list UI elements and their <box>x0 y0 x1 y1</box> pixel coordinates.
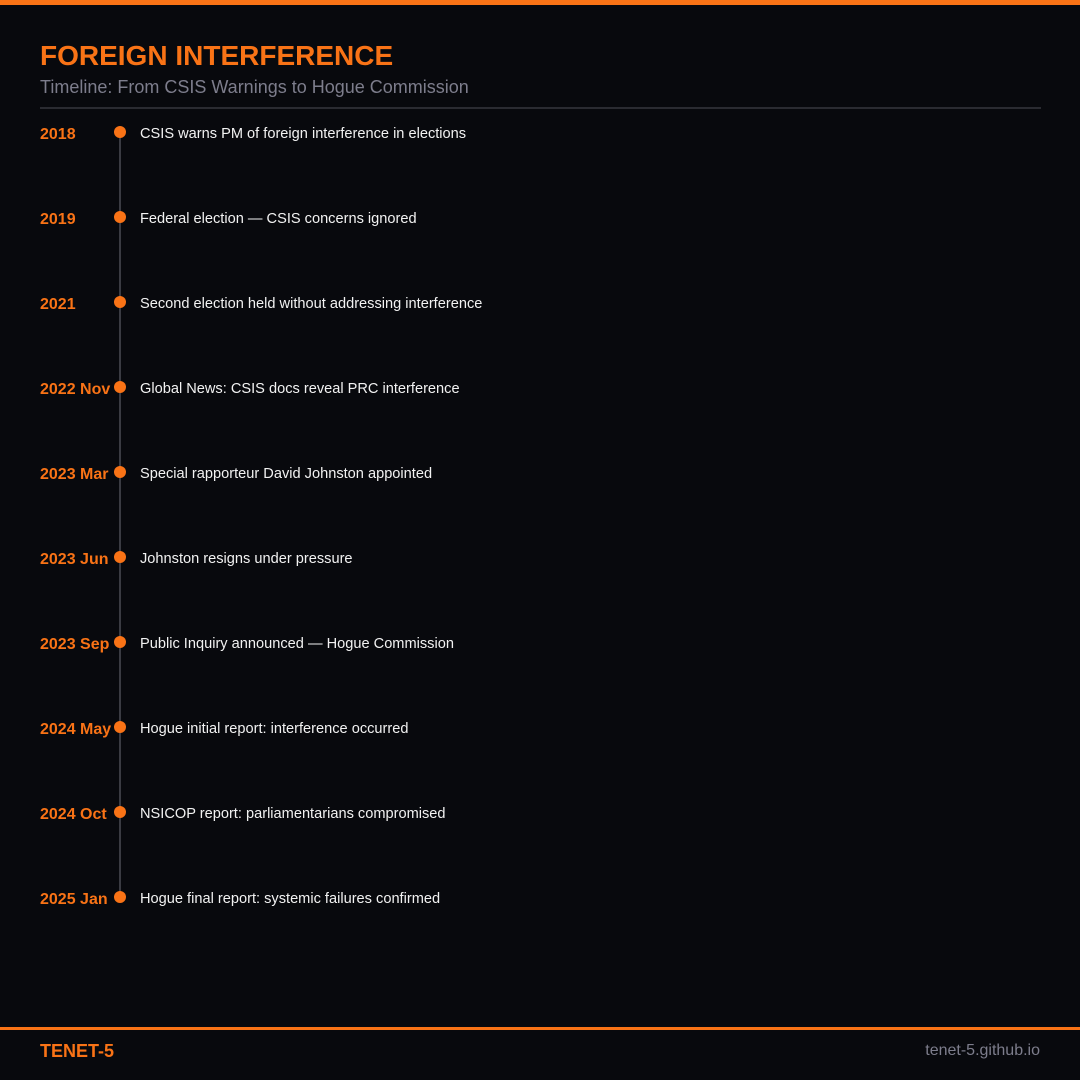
event 2023 Jun: Johnston resigns under pressure <box>140 551 353 567</box>
event 2021: Second election held without addressing interference <box>140 296 482 312</box>
event 2024 May: Hogue initial report: interference occurred <box>140 721 409 737</box>
event 2025 Jan: 2025 Jan <box>40 891 108 908</box>
title: FOREIGN INTERFERENCE <box>40 40 393 71</box>
event 2019: Federal election — CSIS concerns ignored <box>140 211 417 227</box>
event 2024 May <box>40 721 409 738</box>
event 2021: 2021 <box>40 296 76 313</box>
footer url: tenet-5.github.io <box>925 1042 1040 1059</box>
event 2019: 2019 <box>40 211 76 228</box>
timeline <box>40 126 482 908</box>
event 2023 Jun: 2023 Jun <box>40 551 108 568</box>
event 2024 Oct: 2024 Oct <box>40 806 107 823</box>
event 2023 Mar: 2023 Mar <box>40 466 108 483</box>
event 2024 Oct: NSICOP report: parliamentarians compromised <box>140 806 446 822</box>
event 2022 Nov: 2022 Nov <box>40 381 110 398</box>
event 2023 Sep: 2023 Sep <box>40 636 109 653</box>
footer brand: TENET-5 <box>40 1041 114 1061</box>
event 2018: CSIS warns PM of foreign interference in elections <box>140 126 466 142</box>
subtitle: Timeline: From CSIS Warnings to Hogue Commission <box>40 77 469 97</box>
event 2023 Jun <box>40 551 353 568</box>
event 2018: 2018 <box>40 126 76 143</box>
event 2022 Nov: Global News: CSIS docs reveal PRC interference <box>140 381 460 397</box>
event 2023 Sep: Public Inquiry announced — Hogue Commission <box>140 636 454 652</box>
event 2019 <box>40 211 417 228</box>
event 2024 May: 2024 May <box>40 721 111 738</box>
event 2023 Mar: Special rapporteur David Johnston appointed <box>140 466 432 482</box>
event 2025 Jan: Hogue final report: systemic failures confirmed <box>140 891 440 907</box>
